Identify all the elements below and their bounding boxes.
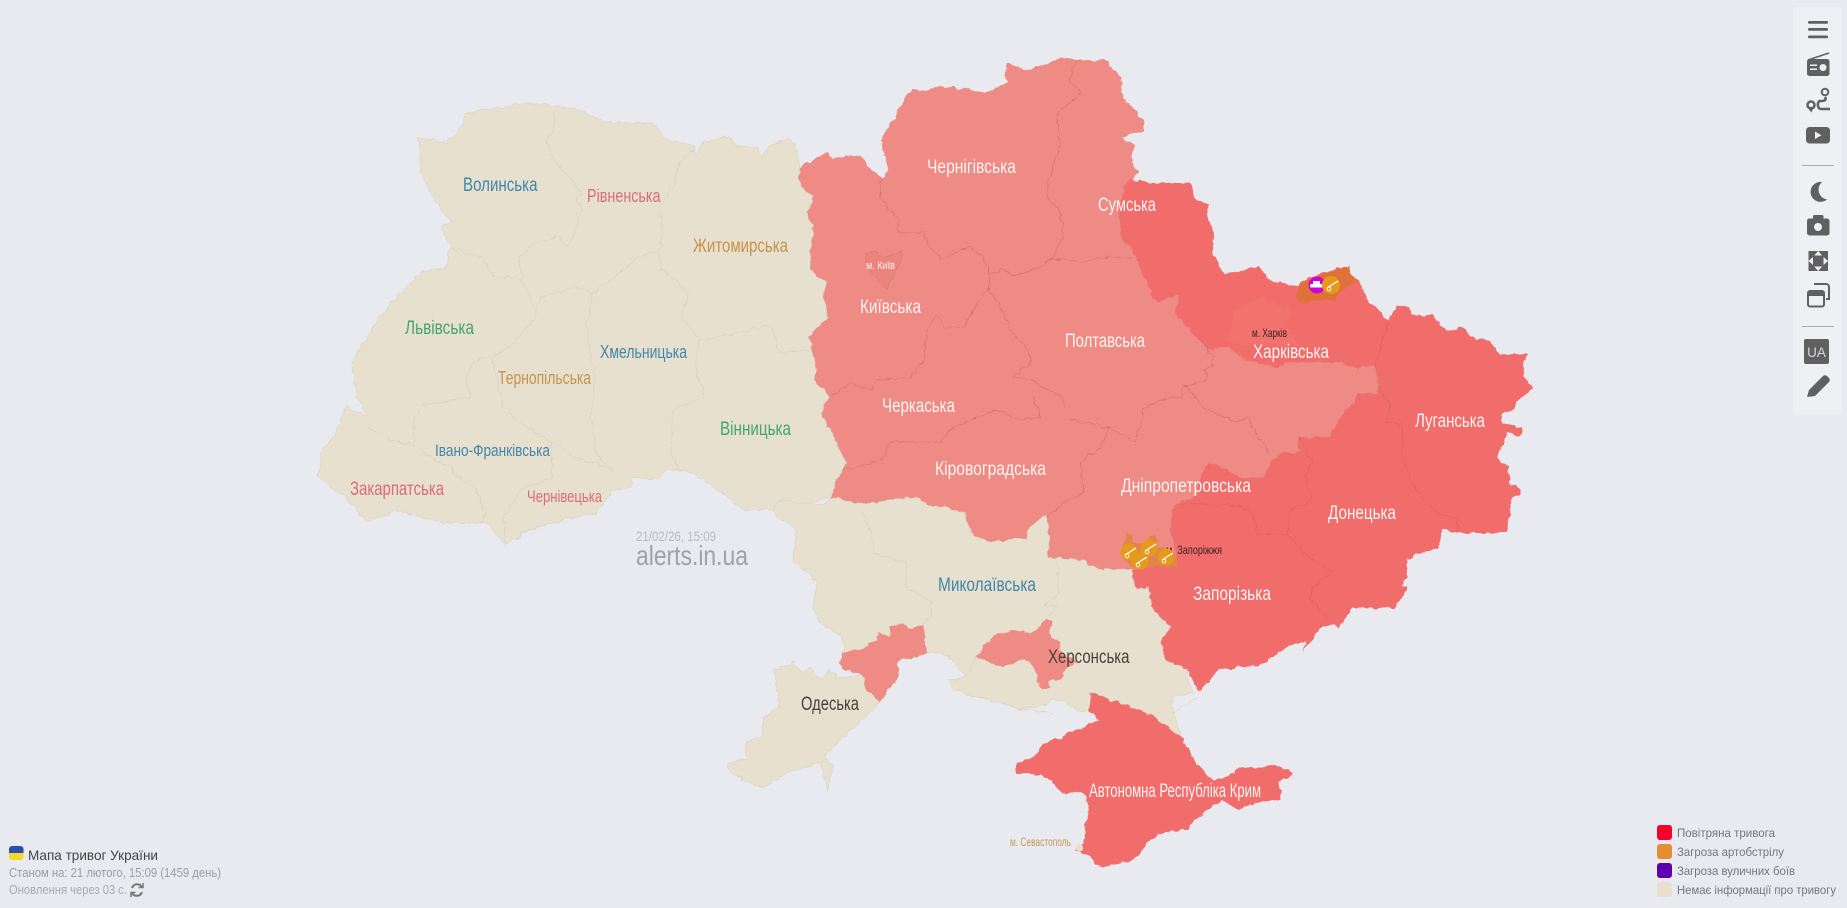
label: Kyiv city: м. Київ [866,260,895,272]
label: Zaporizhzhia city: м. Запоріжжя [1166,545,1222,557]
icon: windows [1808,284,1829,306]
legend item: no information: Немає інформації про тривогу [1677,883,1836,897]
label: Vinnytsia: Вінницька [720,419,791,440]
label: Dnipropetrovsk: Дніпропетровська [1121,476,1251,497]
legend item: street fighting: Загроза вуличних боїв [1677,864,1795,878]
status date: Станом на: 21 лютого, 15:09 (1459 день) [9,866,221,880]
label: Volyn: Волинська [463,175,538,196]
map regions [318,58,1533,868]
label: Lviv: Львівська [405,318,474,339]
label: Chernivtsi: Чернівецька [527,487,602,506]
label: Zaporizhzhia oblast: Запорізька [1193,584,1271,605]
watermark timestamp: 21/02/26, 15:09 [636,528,716,544]
label: Kharkiv city: м. Харків [1252,328,1287,340]
icon: street fighting and artillery markers near Kharkiv [1308,276,1340,294]
icon: artillery markers near Zaporizhzhia [1120,540,1174,570]
label: Mykolaiv: Миколаївська [938,575,1036,596]
icon: pencil [1807,375,1830,397]
toolbar panel [1793,7,1842,415]
region: Sevastopol [1076,844,1084,852]
legend item: artillery: Загроза артобстрілу [1677,845,1784,859]
divider [1802,326,1834,327]
region: Crimea [1015,693,1292,868]
label: Crimea: Автономна Республіка Крим [1089,781,1261,802]
info block bottom left [9,846,221,897]
label: Luhansk: Луганська [1415,411,1485,432]
oblast borders in the alert area [832,60,1458,628]
update countdown: Оновлення через 03 с. [9,883,127,897]
icon: camera [1807,215,1830,236]
language button: UA [1807,345,1826,360]
icon: moon [1811,182,1827,202]
label: Khmelnytskyi: Хмельницька [600,342,688,362]
icon: video [1806,127,1830,144]
label: Zakarpattia: Закарпатська [350,479,444,500]
icon: menu [1808,21,1828,38]
label: Ivano-Frankivsk: Івано-Франківська [435,441,550,460]
divider [1802,165,1834,166]
region: western beige oblasts [318,103,846,545]
label: Cherkasy: Черкаська [882,396,955,417]
region: Kharkiv lighter district [1228,297,1300,345]
region: Kharkiv artillery threat [1297,265,1358,303]
region: pink alert area north and centre [798,58,1533,692]
label: Odesa: Одеська [801,694,859,715]
label: Kharkiv oblast: Харківська [1253,342,1329,363]
region: Zaporizhzhia artillery threat [1122,533,1178,567]
oblast borders in the beige area [368,110,1198,713]
region: Kherson pink patch [976,618,1078,688]
icon: radio [1807,53,1830,76]
heading: Мапа тривог України [28,847,158,863]
label: Donetsk: Донецька [1328,503,1396,524]
label: Ternopil: Тернопільська [498,368,592,388]
label: Poltava: Полтавська [1065,331,1145,352]
language button [1804,339,1829,364]
region: strong red alert area east [1119,180,1533,692]
watermark site name: alerts.in.ua [636,540,748,571]
legend [1657,825,1836,897]
label: Sumy: Сумська [1098,195,1156,216]
label: Kherson: Херсонська [1048,647,1130,668]
label: Rivne: Рівненська [587,186,661,206]
label: Zhytomyr: Житомирська [693,236,788,257]
label: Sevastopol: м. Севастополь [1010,837,1071,849]
label: Chernihiv: Чернігівська [927,157,1016,178]
icon: refresh [131,883,143,897]
region: Kyiv city [866,253,902,290]
label: Kyiv oblast: Київська [860,297,921,318]
region: southern beige oblasts [728,497,1195,792]
icon: route [1808,89,1830,112]
icon: Ukrainian flag [9,846,24,860]
legend item: air alert: Повітряна тривога [1677,826,1775,840]
region: Odesa pink patch [839,623,927,703]
label: Kirovohrad: Кіровоградська [935,459,1046,480]
icon: fullscreen [1808,251,1828,271]
oblast labels [350,157,1485,849]
